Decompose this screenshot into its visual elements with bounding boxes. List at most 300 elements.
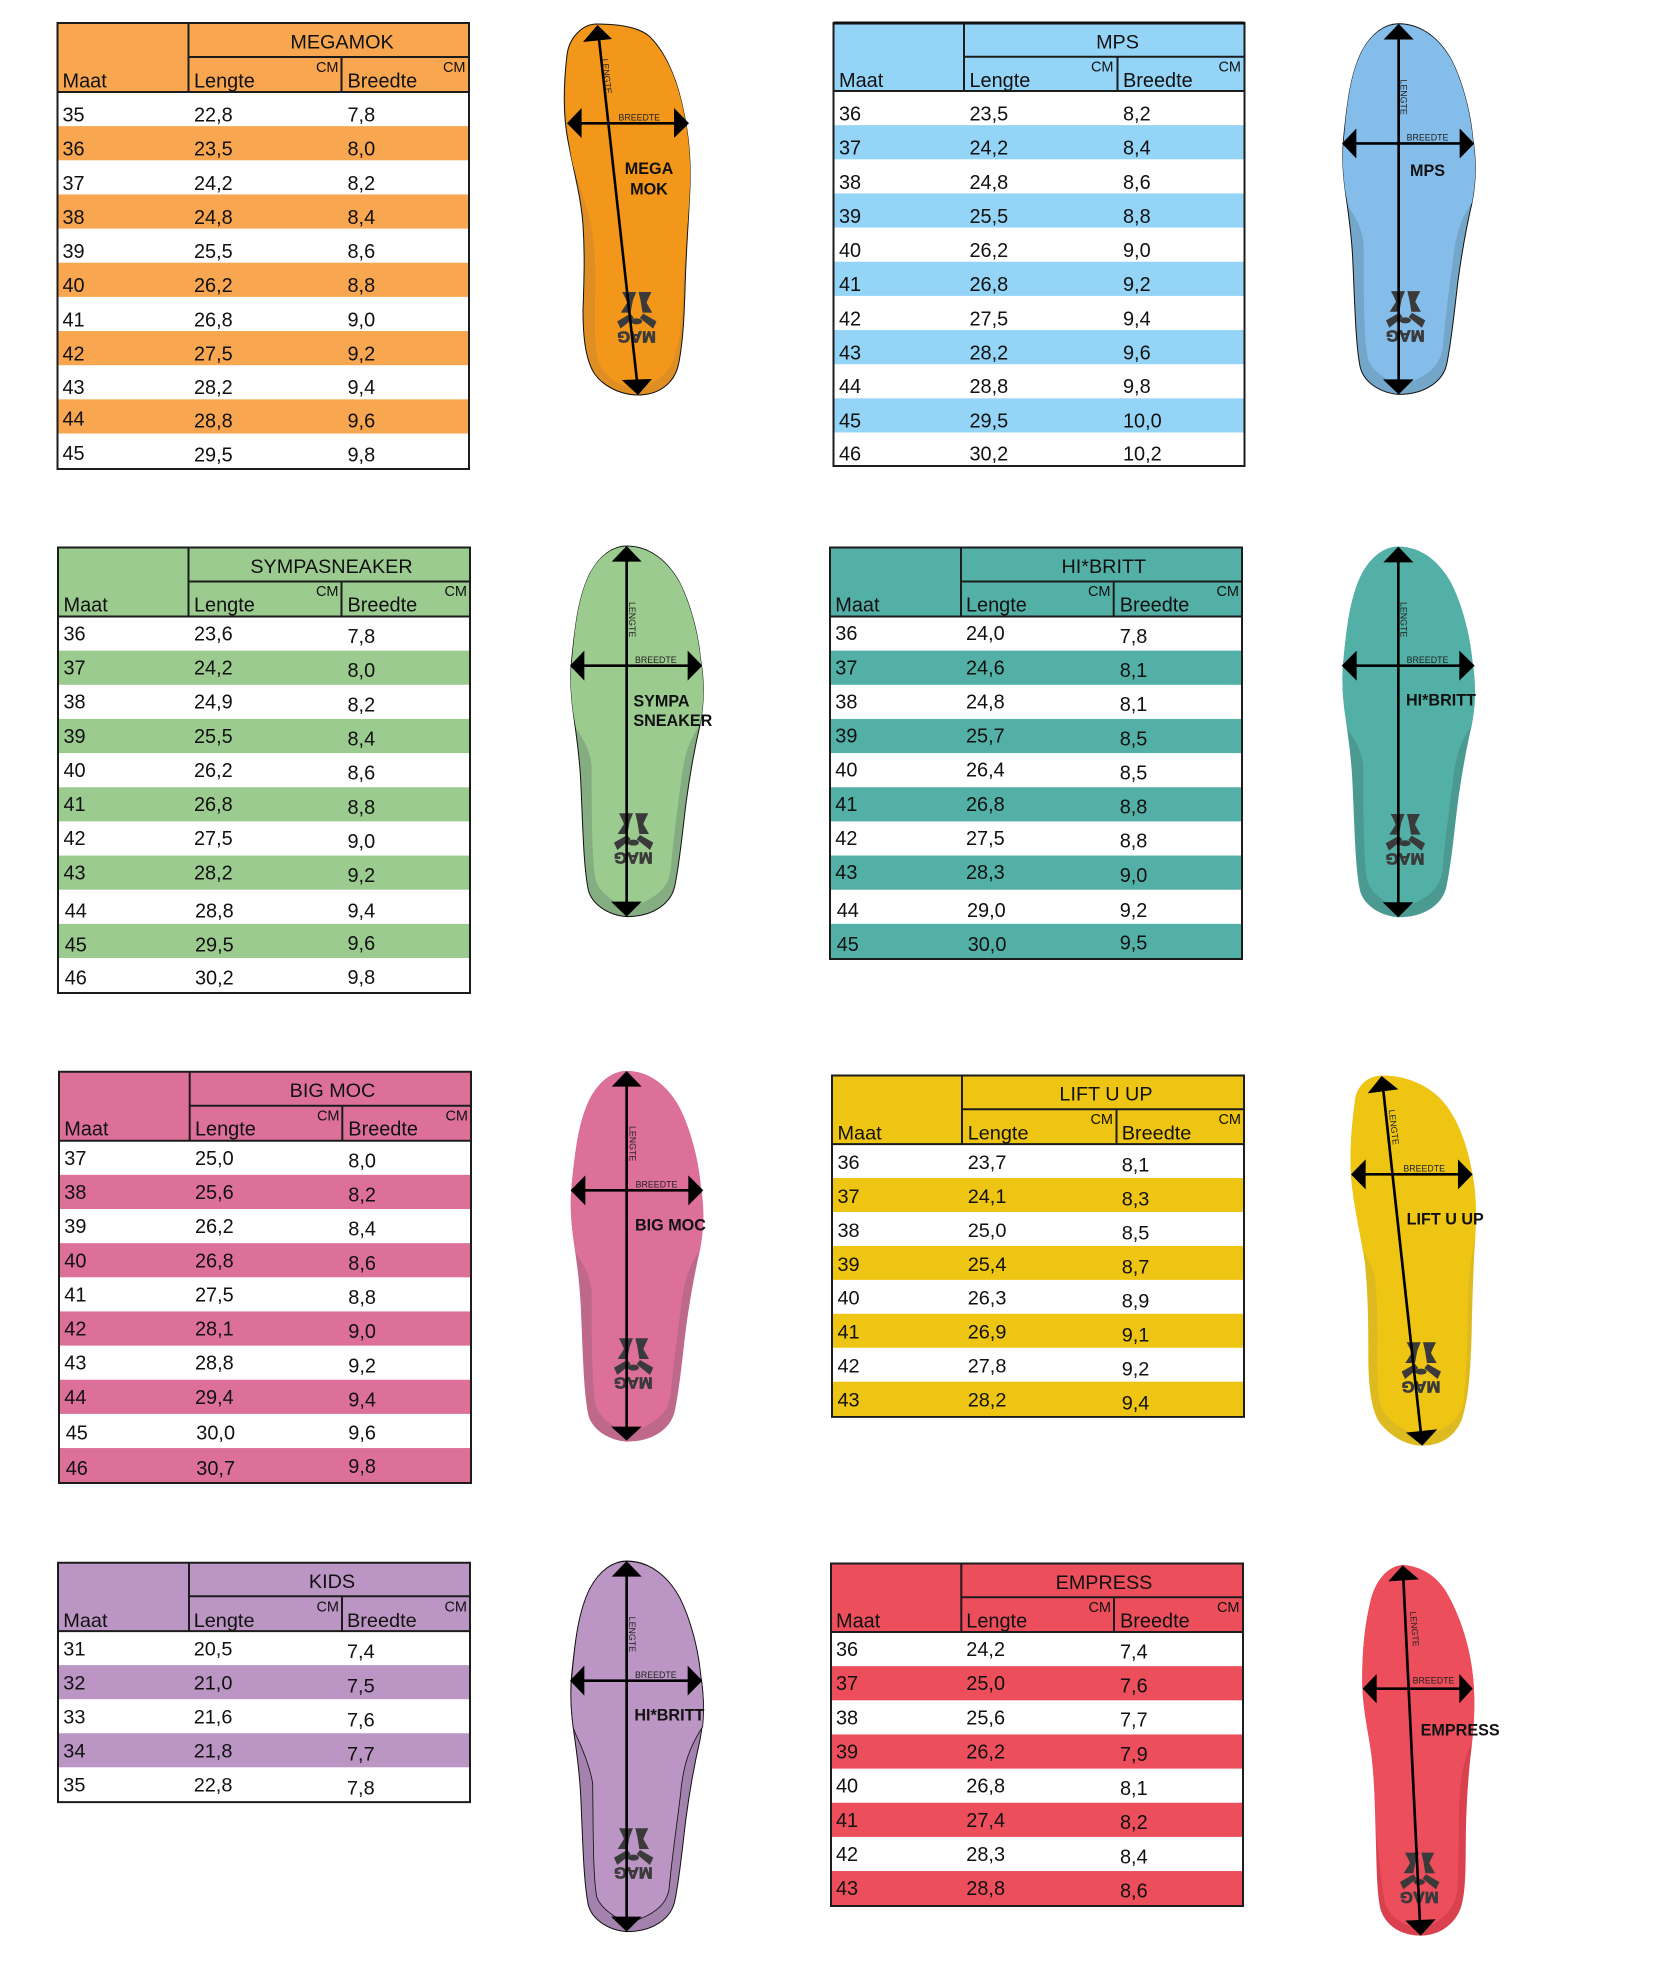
size rows: 25,6 — [966, 1707, 1005, 1729]
size rows: 26,2 — [194, 760, 233, 782]
table header — [831, 1564, 1243, 1632]
size rows: 26,8 — [966, 794, 1005, 816]
table header: Maat — [64, 1119, 109, 1141]
icon: MAG logo: MAG — [1386, 849, 1424, 866]
size rows: 38 — [836, 1707, 858, 1729]
size rows: 9,2 — [348, 865, 375, 887]
size rows: 22,8 — [194, 1775, 232, 1797]
size rows: 9,4 — [1122, 1392, 1149, 1414]
table header: Maat — [835, 594, 880, 616]
sole: SYMPASNEAKER: BREEDTE — [635, 655, 677, 665]
size rows: 35 — [62, 104, 85, 126]
sole: LIFT U UP: LENGTE — [1387, 1109, 1401, 1145]
size rows: 39 — [836, 1742, 858, 1764]
size rows: 8,5 — [1120, 728, 1147, 750]
size rows: 26,8 — [194, 309, 233, 331]
size rows: 36 — [839, 104, 861, 126]
size rows: 36 — [837, 1152, 860, 1174]
size rows: 37 — [835, 657, 857, 679]
size rows: 9,2 — [1123, 274, 1151, 296]
sole: HI*BRITT — [1342, 547, 1476, 917]
table header: MEGAMOK — [290, 32, 394, 54]
size rows: 26,8 — [966, 1776, 1005, 1798]
table header: CM — [444, 584, 467, 600]
size rows: 8,7 — [1122, 1257, 1149, 1278]
size rows: 8,2 — [348, 1185, 376, 1207]
sole name: LIFT U UP — [1407, 1211, 1484, 1229]
size rows: 7,4 — [347, 1641, 375, 1663]
size rows: 24,0 — [966, 623, 1005, 645]
size rows: 43 — [62, 377, 85, 399]
arrow: length — [583, 25, 652, 395]
size rows: 25,4 — [968, 1254, 1006, 1276]
size rows: 8,8 — [1120, 797, 1147, 819]
size rows: 42 — [836, 1844, 858, 1866]
size rows: 41 — [835, 794, 857, 816]
size rows: 39 — [64, 1216, 86, 1238]
size rows: 41 — [62, 309, 85, 331]
icon: MAG logo: MAG — [617, 327, 656, 344]
size rows — [64, 623, 375, 990]
sole name: MOK — [630, 180, 668, 198]
size rows: 42 — [62, 344, 85, 366]
size rows: 36 — [836, 1639, 858, 1661]
size rows: 30,0 — [968, 934, 1006, 956]
size rows: 45 — [65, 934, 87, 956]
size rows: 8,0 — [348, 1150, 376, 1172]
size rows: 7,7 — [1120, 1710, 1148, 1732]
sole name: HI*BRITT — [1406, 692, 1476, 710]
table header: CM — [1218, 1112, 1241, 1128]
size rows: 37 — [62, 173, 85, 195]
icon: MAG logo — [614, 1828, 653, 1881]
size rows: 28,2 — [968, 1390, 1006, 1411]
table: KIDS — [58, 1563, 470, 1802]
size rows: 26,3 — [968, 1288, 1006, 1310]
size rows: 7,6 — [1120, 1676, 1148, 1698]
size rows: 24,6 — [966, 657, 1005, 679]
size rows: 9,6 — [348, 1423, 376, 1445]
size rows: 8,1 — [1120, 694, 1147, 716]
size rows: 22,8 — [194, 104, 233, 126]
sole: KIDS — [570, 1561, 704, 1932]
sole: EMPRESS: BREEDTE — [1413, 1675, 1454, 1685]
size rows: 46 — [839, 444, 861, 466]
size rows: 10,2 — [1123, 444, 1162, 466]
size rows: 8,6 — [348, 763, 375, 785]
table header: Lengte — [968, 1123, 1029, 1145]
size rows: 27,8 — [968, 1356, 1006, 1378]
size rows: 42 — [837, 1356, 860, 1378]
table header: Breedte — [348, 1119, 418, 1141]
icon: MAG logo — [1402, 1342, 1441, 1395]
size rows: 41 — [837, 1322, 860, 1344]
size rows: 8,2 — [348, 694, 375, 716]
size rows: 9,4 — [1123, 308, 1151, 330]
size rows: 45 — [837, 934, 859, 956]
size rows: 37 — [839, 138, 861, 160]
size rows: 8,4 — [1120, 1846, 1148, 1868]
size rows: 9,8 — [348, 967, 375, 989]
size rows: 44 — [837, 900, 859, 922]
table header: BIG MOC — [290, 1080, 375, 1102]
size rows: 29,5 — [194, 444, 233, 466]
table header: CM — [1091, 60, 1114, 76]
size rows: 8,9 — [1122, 1290, 1149, 1312]
sole name: BIG MOC — [635, 1216, 706, 1234]
size rows — [64, 1148, 376, 1480]
size rows: 28,2 — [194, 862, 233, 884]
table header: Lengte — [194, 70, 255, 92]
size rows: 8,6 — [348, 241, 375, 263]
sole: BIG MOC: BREEDTE — [636, 1180, 677, 1190]
arrow: width — [1351, 1159, 1473, 1189]
size rows: 9,4 — [348, 900, 375, 922]
table header: Maat — [839, 70, 884, 92]
size rows: 41 — [839, 274, 861, 296]
size rows — [839, 104, 1162, 465]
icon: MAG logo — [1386, 814, 1425, 866]
size rows: 8,2 — [1123, 104, 1151, 126]
table header: CM — [1090, 1112, 1113, 1128]
size rows: 40 — [64, 1250, 86, 1272]
icon: MAG logo: MAG — [614, 1864, 653, 1881]
size rows: 43 — [64, 1353, 86, 1375]
table header — [58, 548, 470, 616]
size rows: 28,3 — [966, 862, 1005, 884]
icon: MAG logo — [1400, 1853, 1439, 1905]
size rows: 26,2 — [970, 240, 1008, 262]
size rows: 20,5 — [194, 1639, 232, 1661]
table header: Breedte — [348, 594, 417, 616]
size rows: 23,5 — [970, 104, 1008, 126]
sole: MEGAMOK: BREEDTE — [618, 113, 660, 123]
size rows: 24,2 — [966, 1639, 1005, 1661]
arrow: width — [1342, 128, 1474, 158]
size rows: 24,1 — [968, 1186, 1006, 1208]
table: EMPRESS — [831, 1564, 1243, 1906]
size rows: 39 — [62, 241, 85, 263]
icon: MAG logo: MAG — [614, 849, 653, 866]
size rows: 9,0 — [348, 831, 375, 853]
table: SYMPASNEAKER — [58, 548, 470, 993]
size rows: 26,2 — [966, 1742, 1005, 1764]
table header: CM — [443, 60, 466, 76]
size rows: 8,4 — [348, 1219, 376, 1241]
table header: Breedte — [1120, 594, 1189, 616]
sole: HI*BRITT: LENGTE — [1399, 602, 1409, 637]
size rows: 9,8 — [348, 1456, 376, 1478]
size rows: 42 — [839, 308, 861, 330]
size rows: 8,1 — [1120, 660, 1147, 682]
table header: Lengte — [966, 594, 1027, 616]
size rows — [63, 1639, 375, 1799]
table header: EMPRESS — [1056, 1572, 1152, 1594]
size rows: 25,5 — [194, 726, 233, 748]
table header: Maat — [836, 1610, 881, 1632]
size rows: 30,7 — [196, 1458, 235, 1480]
sole: SYMPASNEAKER: LENGTE — [627, 602, 637, 637]
size rows: 9,2 — [348, 344, 375, 366]
size rows: 45 — [62, 443, 85, 465]
size rows: 8,8 — [348, 797, 375, 819]
size rows: 36 — [64, 623, 86, 645]
size rows: 9,6 — [348, 410, 375, 432]
arrow: length — [611, 1071, 642, 1441]
table header: Breedte — [1122, 1123, 1191, 1145]
size rows: 7,8 — [1120, 626, 1147, 648]
size rows: 43 — [836, 1878, 858, 1900]
size rows: 42 — [64, 1319, 86, 1341]
icon: MAG logo — [617, 292, 657, 344]
size rows: 28,8 — [970, 376, 1008, 398]
size rows: 8,6 — [1123, 172, 1151, 194]
size rows: 41 — [64, 794, 86, 816]
size rows: 8,4 — [348, 207, 375, 229]
size rows: 7,8 — [348, 626, 375, 648]
size rows: 28,8 — [194, 410, 233, 432]
size rows: 9,4 — [348, 1389, 376, 1411]
size rows: 8,6 — [1120, 1880, 1148, 1902]
size rows: 39 — [64, 726, 86, 748]
size rows: 27,5 — [966, 828, 1005, 850]
icon: MAG logo: MAG — [1400, 1888, 1439, 1905]
table header: Lengte — [966, 1610, 1027, 1632]
table header: Maat — [837, 1123, 882, 1145]
sole: LIFT U UP: BREEDTE — [1403, 1163, 1445, 1173]
size rows — [835, 623, 1147, 956]
size rows: 7,6 — [347, 1709, 375, 1731]
size rows: 24,8 — [194, 207, 233, 229]
icon: MAG logo — [614, 1338, 653, 1391]
table header: CM — [1216, 584, 1239, 600]
size rows: 40 — [839, 240, 861, 262]
sole: MPS: LENGTE — [1398, 79, 1408, 115]
size rows: 8,8 — [348, 275, 375, 297]
size rows: 25,7 — [966, 726, 1005, 748]
size rows: 41 — [836, 1810, 858, 1832]
arrow: width — [570, 1666, 702, 1696]
size rows: 43 — [64, 862, 86, 884]
sole: HI*BRITT: BREEDTE — [1407, 655, 1448, 665]
size rows: 42 — [64, 828, 86, 850]
size rows: 28,8 — [195, 1353, 234, 1375]
size rows: 29,4 — [195, 1387, 234, 1409]
sole name: HI*BRITT — [634, 1707, 704, 1725]
arrow: length — [1383, 24, 1414, 394]
size rows: 38 — [64, 1182, 86, 1204]
arrow: width — [1363, 1674, 1473, 1703]
table: MPS — [834, 23, 1244, 466]
size rows: 9,8 — [1123, 376, 1151, 398]
table header — [832, 1076, 1244, 1145]
size rows: 29,0 — [967, 900, 1006, 922]
table header: Breedte — [1120, 1610, 1190, 1632]
size rows: 43 — [835, 862, 857, 884]
table header: Maat — [62, 70, 107, 92]
table: MEGAMOK — [58, 23, 469, 469]
sole: MPS — [1342, 24, 1475, 394]
size rows: 39 — [837, 1254, 860, 1276]
size rows: 25,5 — [970, 206, 1008, 228]
arrow: length — [611, 546, 642, 917]
size rows: 7,8 — [347, 1777, 375, 1799]
size rows: 9,8 — [348, 444, 375, 466]
size rows: 7,5 — [347, 1675, 375, 1697]
sole: LIFT U UP — [1351, 1076, 1484, 1446]
size rows: 8,8 — [1120, 831, 1147, 853]
size rows: 40 — [837, 1288, 860, 1310]
size rows: 24,2 — [194, 657, 233, 679]
size rows: 39 — [839, 206, 861, 228]
size rows: 25,6 — [195, 1182, 234, 1204]
arrow: width — [570, 651, 702, 681]
size rows: 28,3 — [966, 1844, 1005, 1866]
size rows: 8,8 — [1123, 206, 1151, 228]
sole: EMPRESS: LENGTE — [1408, 1611, 1421, 1647]
table header: Maat — [64, 594, 108, 616]
size rows: 26,8 — [970, 274, 1008, 296]
size rows: 8,8 — [348, 1287, 376, 1309]
size rows: 36 — [62, 139, 85, 161]
size rows: 44 — [64, 1387, 86, 1409]
size rows: 29,5 — [195, 934, 234, 956]
size rows: 26,4 — [966, 760, 1005, 782]
size rows: 21,6 — [194, 1707, 232, 1729]
size rows: 9,0 — [1123, 240, 1151, 262]
size rows: 45 — [66, 1423, 88, 1445]
table header — [58, 23, 469, 92]
sole: BIG MOC: LENGTE — [627, 1126, 637, 1161]
size rows: 27,5 — [970, 308, 1008, 330]
sole name: SNEAKER — [633, 712, 713, 730]
size rows: 8,2 — [348, 173, 375, 195]
size rows: 38 — [62, 207, 85, 229]
size rows: 9,0 — [1120, 865, 1147, 887]
size rows: 24,2 — [970, 138, 1008, 160]
size rows: 44 — [62, 409, 85, 431]
size rows: 8,0 — [348, 660, 375, 682]
size rows: 40 — [835, 760, 857, 782]
table header: CM — [316, 584, 338, 600]
arrow: length — [1368, 1076, 1437, 1446]
size rows: 31 — [63, 1639, 85, 1661]
size rows: 27,4 — [966, 1810, 1005, 1832]
table header: LIFT U UP — [1059, 1084, 1153, 1106]
size rows: 8,4 — [348, 728, 375, 750]
size rows: 8,0 — [348, 139, 375, 161]
arrow: length — [1383, 547, 1413, 917]
size rows: 37 — [64, 657, 86, 679]
size rows: 23,7 — [968, 1152, 1006, 1174]
table header — [59, 1072, 471, 1141]
size rows: 40 — [64, 760, 86, 782]
size rows: 38 — [835, 691, 857, 713]
size rows: 9,2 — [1122, 1358, 1149, 1380]
size rows: 21,0 — [194, 1673, 232, 1695]
size rows: 9,5 — [1120, 933, 1147, 955]
size rows: 8,2 — [1120, 1812, 1148, 1834]
table header: Breedte — [348, 70, 417, 92]
size rows: 24,8 — [970, 172, 1008, 194]
icon: MAG logo — [614, 813, 653, 866]
table header: CM — [1088, 584, 1110, 600]
size rows: 24,2 — [194, 173, 233, 195]
size rows: 25,5 — [194, 241, 233, 263]
size rows: 42 — [835, 828, 857, 850]
size rows: 7,9 — [1120, 1744, 1148, 1766]
size rows: 7,7 — [347, 1743, 375, 1765]
size rows — [838, 1152, 1149, 1414]
size rows: 28,8 — [966, 1878, 1005, 1900]
size rows: 41 — [64, 1284, 86, 1306]
size rows: 28,2 — [970, 342, 1008, 364]
table header: Breedte — [347, 1610, 417, 1632]
size rows: 21,8 — [194, 1741, 232, 1763]
table header: Breedte — [1123, 70, 1193, 92]
size rows: 37 — [837, 1186, 860, 1208]
size rows: 24,8 — [966, 691, 1005, 713]
size rows: 36 — [835, 623, 857, 645]
size rows: 23,5 — [194, 139, 233, 161]
size rows: 9,2 — [348, 1355, 376, 1377]
table header: Lengte — [194, 594, 255, 616]
size rows: 27,5 — [194, 828, 233, 850]
size rows: 9,6 — [348, 933, 375, 955]
size rows: 40 — [836, 1776, 858, 1798]
size rows: 26,8 — [194, 794, 233, 816]
table header: CM — [445, 1108, 468, 1124]
sole: MEGAMOK: LENGTE — [600, 58, 614, 94]
size rows: 28,1 — [195, 1319, 234, 1341]
table header: CM — [444, 1599, 467, 1615]
arrow: length — [611, 1561, 642, 1932]
size rows: 29,5 — [970, 410, 1008, 432]
table header: CM — [316, 1599, 339, 1615]
icon: MAG logo: MAG — [614, 1374, 653, 1391]
size rows: 33 — [63, 1707, 85, 1729]
size rows: 46 — [65, 968, 87, 990]
sole name: MPS — [1410, 162, 1445, 180]
table header: CM — [316, 60, 338, 76]
size rows: 43 — [839, 342, 861, 364]
size rows: 30,2 — [970, 444, 1008, 466]
size rows: 25,0 — [195, 1148, 234, 1170]
size rows: 9,2 — [1120, 900, 1147, 922]
sole: BIG MOC — [571, 1071, 706, 1442]
size rows: 26,9 — [968, 1322, 1006, 1344]
size rows: 25,0 — [968, 1220, 1006, 1242]
size rows: 43 — [837, 1390, 860, 1411]
size rows: 32 — [63, 1673, 85, 1695]
size rows: 8,4 — [1123, 138, 1151, 160]
table: HI*BRITT — [830, 548, 1242, 959]
table header: Maat — [63, 1610, 108, 1632]
size rows: 30,2 — [195, 968, 234, 990]
size rows: 8,3 — [1122, 1189, 1149, 1211]
size rows: 25,0 — [966, 1673, 1005, 1695]
size rows: 38 — [64, 692, 86, 714]
size rows — [836, 1639, 1148, 1902]
size rows: 40 — [62, 275, 85, 297]
sole name: MEGA — [625, 160, 674, 178]
size rows: 23,6 — [194, 623, 233, 645]
size rows: 45 — [839, 410, 861, 432]
table header: CM — [1088, 1600, 1111, 1616]
size rows: 26,2 — [194, 275, 233, 297]
table header — [834, 23, 1244, 92]
sole: MPS: BREEDTE — [1407, 132, 1448, 142]
